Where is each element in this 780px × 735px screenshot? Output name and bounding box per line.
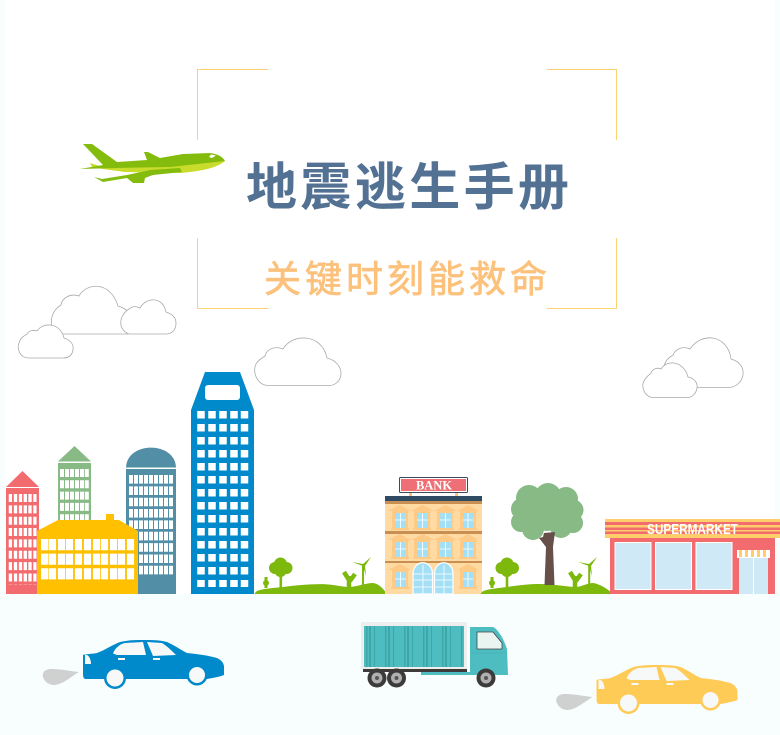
vehicle: yellow car [556,665,738,714]
subtitle: 关键时刻能救命 [264,259,551,300]
title frame [198,70,616,308]
icon: airplane [80,144,225,183]
sign: bank: BANK [416,478,452,492]
shop door and awning [737,550,770,594]
building: supermarket: SUPERMARKET [647,522,738,538]
vehicle: delivery truck [361,622,508,688]
cloud: large upper left [51,286,131,334]
cloud: small left of group [18,325,73,358]
windows: bank [388,505,479,589]
cloud: small right of group [121,300,176,334]
building: supermarket [605,519,780,594]
cloud: center [255,338,341,386]
building: yellow block [37,514,138,594]
truck wheels [368,668,496,688]
building: bank [385,478,482,594]
building: red tower [6,471,39,594]
building: teal dome tower [126,448,176,594]
vehicle: blue car [43,640,224,689]
building: green tower [58,446,91,533]
building: blue skyscraper [191,372,254,594]
doors: bank [413,563,453,594]
cloud: right back [664,338,743,388]
large tree [511,483,584,585]
landscape: right hill with trees and wind turbine [481,483,613,594]
landscape: left hill with tree and wind turbine [255,557,387,594]
title: 地震逃生手册 [246,159,572,216]
cloud: right front [643,363,697,398]
